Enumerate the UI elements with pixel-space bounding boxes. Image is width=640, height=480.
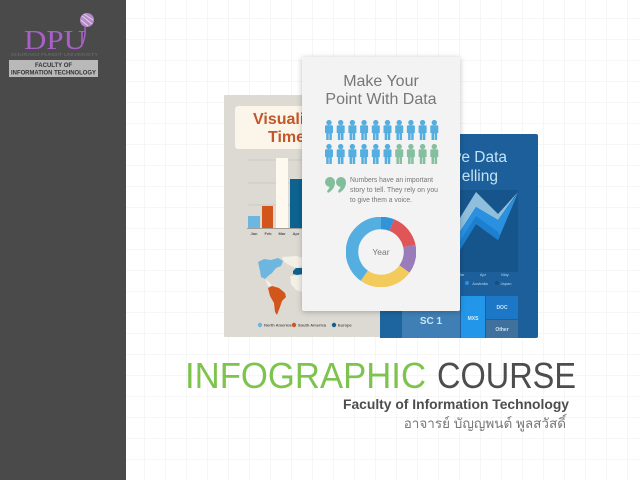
quote text: story to tell. They rely on you	[350, 187, 438, 194]
logo: DPU: FACULTY OF	[35, 63, 72, 69]
chart labels: Apr	[480, 272, 487, 277]
treemap: MXS	[468, 316, 479, 322]
logo: DPU	[9, 13, 98, 77]
bar chart: Mar	[278, 231, 286, 236]
heading: storytelling	[454, 149, 507, 185]
heading: visualize time: Time	[268, 129, 305, 146]
bar chart: Jan	[251, 231, 258, 236]
bar chart: Apr	[293, 231, 300, 236]
chart labels: May	[501, 272, 509, 277]
world map	[258, 256, 303, 315]
sidebar	[0, 0, 126, 480]
heading: make your point with data	[325, 73, 437, 108]
panel: data storytelling card	[380, 134, 538, 338]
quote text: to give them a voice.	[350, 197, 412, 204]
logo: DPU: INFORMATION TECHNOLOGY	[11, 70, 96, 76]
treemap: SC 1	[420, 316, 443, 327]
bar chart: Feb	[264, 231, 272, 236]
icon: quotation mark	[325, 177, 346, 193]
area chart	[440, 190, 518, 280]
legend: South America	[298, 322, 327, 328]
chart labels	[458, 272, 511, 286]
title: COURSE	[437, 355, 576, 396]
legend	[258, 322, 353, 328]
heading: storytelling: elling	[462, 168, 498, 185]
title	[185, 355, 576, 396]
logo: DPU: DPU	[24, 25, 86, 55]
heading: visualize time	[235, 106, 325, 149]
title: INFOGRAPHIC	[185, 355, 426, 396]
instructor name: อาจารย์ บัญญพนต์ พูลสวัสดิ์	[404, 413, 568, 432]
donut label: Year	[372, 247, 390, 257]
donut chart	[352, 223, 410, 281]
heading: make your point with data: Make Your	[343, 73, 419, 90]
heading: make your point with data: Point With Data	[325, 91, 437, 108]
quote text	[350, 177, 438, 204]
panel: make your point card	[302, 57, 460, 311]
treemap: DOC	[496, 305, 508, 311]
quote text: Numbers have an important	[350, 177, 433, 184]
logo: DPU: DHURAKIJ PUNDIT UNIVERSITY	[11, 52, 98, 57]
treemap	[380, 296, 518, 338]
panel: time chart card	[224, 95, 384, 337]
legend: North America	[264, 322, 292, 328]
heading: visualize time: Visualize	[253, 111, 321, 128]
bar chart	[247, 158, 320, 236]
subtitle: Faculty of Information Technology	[343, 396, 569, 412]
pictogram: people	[325, 120, 438, 164]
chart labels: Japan	[501, 281, 511, 286]
heading: storytelling: ve Data	[454, 149, 507, 166]
treemap: Other	[495, 327, 509, 333]
chart labels: Australia	[472, 281, 489, 286]
chart labels: Mar	[458, 272, 465, 277]
legend: Europe	[338, 322, 353, 328]
